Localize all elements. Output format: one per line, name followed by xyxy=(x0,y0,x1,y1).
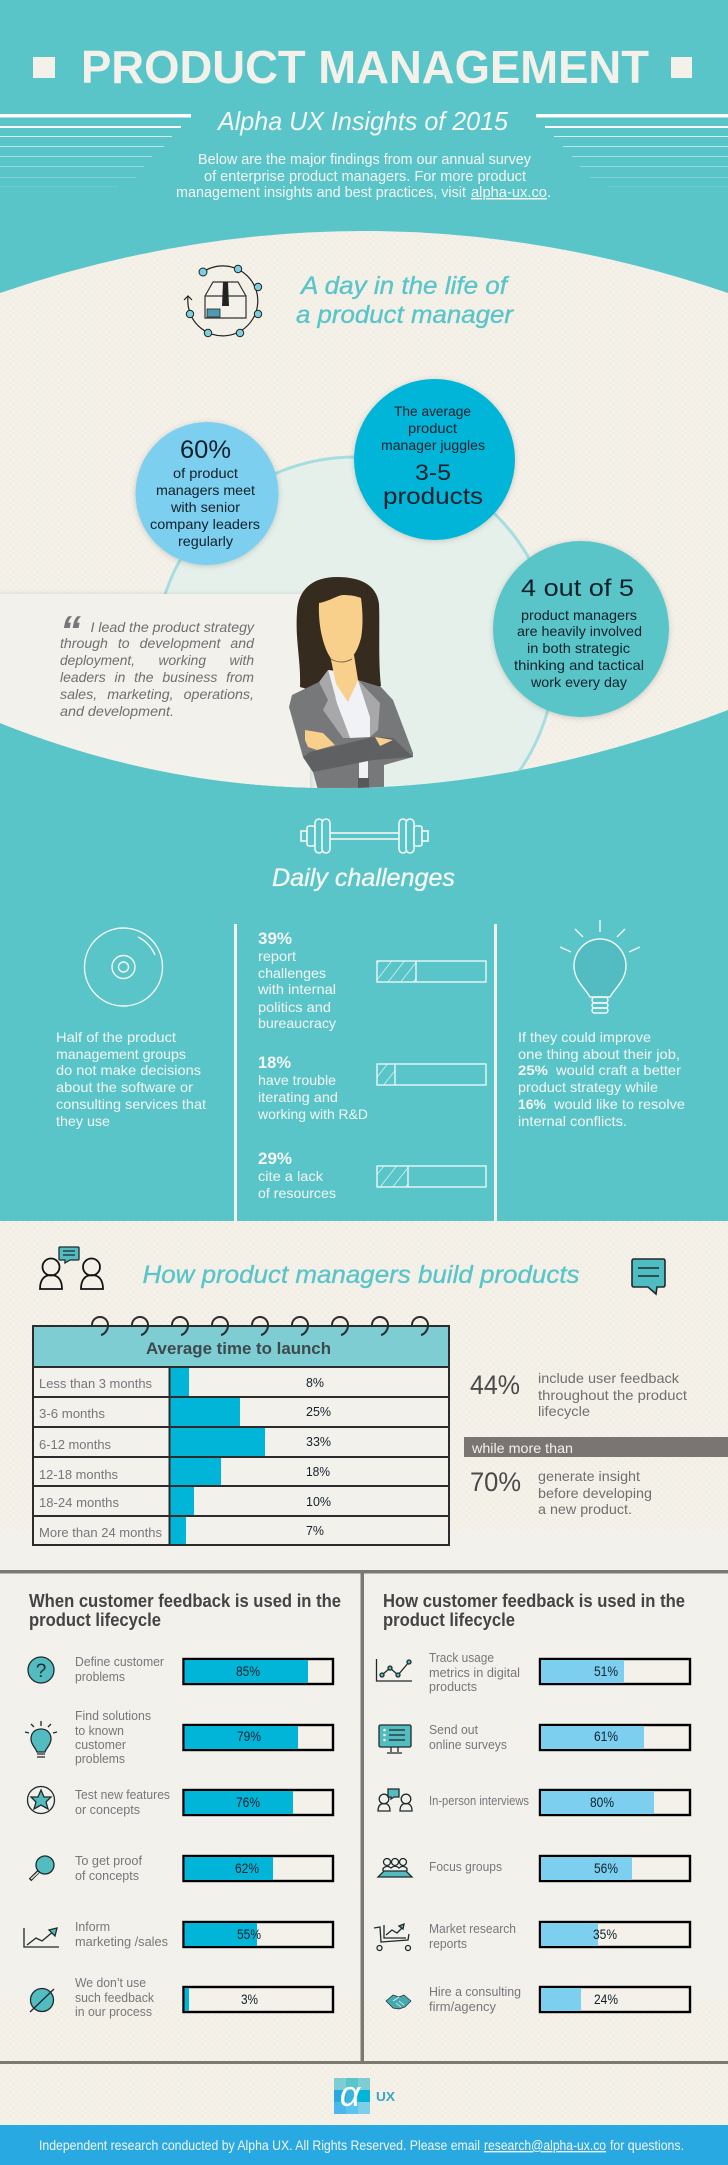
subtitle with side lines: Alpha UX Insights of 2015 xyxy=(216,106,509,136)
callout: 4 out of 5: 4 out of 5 xyxy=(521,575,634,602)
spiral rings xyxy=(92,1317,428,1335)
text: half of the groups: consulting services that xyxy=(56,1096,206,1112)
subtitle with side lines xyxy=(0,106,728,187)
row: track usage: 51% xyxy=(594,1663,618,1679)
row: test new features: or concepts xyxy=(75,1802,140,1817)
crossed arm xyxy=(303,737,413,772)
row: track usage: Track usage xyxy=(429,1650,494,1665)
row: define customer problems: 85% xyxy=(236,1663,260,1679)
row: inform marketing: 55% xyxy=(237,1926,261,1942)
hair xyxy=(297,577,381,700)
callout: 3-5 products: products xyxy=(383,483,483,509)
stat: 18%: have trouble xyxy=(258,1072,336,1088)
quote xyxy=(60,607,255,719)
logo: alpha UX: UX xyxy=(376,2089,395,2104)
row: inform marketing: marketing /sales xyxy=(75,1934,168,1949)
callout: 4 out of 5: are heavily involved xyxy=(517,623,642,639)
callout: 60% xyxy=(136,422,278,565)
stat: 18%: 18% xyxy=(258,1053,291,1072)
text: if they could improve: 25% xyxy=(518,1062,549,1078)
panel: how customer feedback is used xyxy=(374,1591,690,2014)
callout: 3-5 products: product xyxy=(408,420,457,436)
icon: chat bubble xyxy=(632,1259,665,1294)
row: to get proof: of concepts xyxy=(75,1868,139,1883)
face xyxy=(319,595,362,662)
row: define customer problems: Define customer xyxy=(75,1654,165,1669)
chart: average time to launch: Average time to launch xyxy=(146,1339,331,1358)
row: we don't use: in our process xyxy=(75,2004,152,2019)
quote: and development. xyxy=(60,703,174,719)
footer: research@alpha-ux.co xyxy=(484,2137,606,2153)
stat: 44% xyxy=(470,1370,687,1419)
stat: 39%: 39% xyxy=(258,929,292,948)
stat: 39%: bureaucracy xyxy=(258,1015,336,1031)
callout: 60%: with senior xyxy=(170,499,240,515)
text: if they could improve: If they could improve xyxy=(518,1029,651,1045)
row: online surveys xyxy=(379,1722,690,1753)
stat: 18%: working with R&D xyxy=(257,1106,368,1122)
stat: 39%: challenges xyxy=(258,965,326,981)
quote: sales, marketing, operations, xyxy=(60,686,254,702)
row: online surveys: Send out xyxy=(429,1722,478,1737)
heading: how product managers build products: How product managers build products xyxy=(142,1261,580,1289)
stat: 29%: cite a lack xyxy=(258,1168,324,1184)
stat: 70%: 70% xyxy=(470,1467,521,1497)
row: to get proof: To get proof xyxy=(75,1853,142,1868)
large ring xyxy=(164,456,549,788)
stat: 70% xyxy=(470,1467,652,1517)
row: consulting firm xyxy=(386,1984,690,2014)
intro text: . xyxy=(547,184,551,201)
row: in-person interviews: 80% xyxy=(590,1794,614,1810)
logo: alpha UX: α xyxy=(340,2073,362,2114)
row: to get proof xyxy=(30,1853,333,1883)
row: find solutions: 79% xyxy=(237,1728,261,1744)
footer xyxy=(0,2125,728,2165)
text: half of the groups: Half of the product xyxy=(56,1029,176,1045)
text: if they could improve: one thing about their job, xyxy=(518,1046,680,1062)
right hand xyxy=(375,737,393,746)
icon: product box cycle xyxy=(184,265,262,337)
heading: daily challenges: Daily challenges xyxy=(272,864,455,892)
row: online surveys: 61% xyxy=(594,1728,618,1744)
band: while more than: while more than xyxy=(471,1440,573,1456)
row values: 8% xyxy=(306,1375,324,1390)
stat: 29%: of resources xyxy=(258,1185,336,1201)
row: consulting firm: firm/agency xyxy=(429,1999,496,2014)
row: to get proof: 62% xyxy=(235,1860,259,1876)
stat: 18% xyxy=(257,1053,486,1122)
callout: 3-5 products xyxy=(354,379,515,540)
shirt xyxy=(328,670,370,738)
row labels xyxy=(39,1376,162,1540)
row: track usage: metrics in digital xyxy=(429,1665,520,1680)
quote: “ xyxy=(60,607,81,654)
callout: 4 out of 5: in both strategic xyxy=(527,640,630,656)
row: test new features: 76% xyxy=(236,1794,260,1810)
row: we don't use: We don’t use xyxy=(75,1975,146,1990)
row: focus groups: Focus groups xyxy=(429,1859,502,1874)
heading: when: When customer feedback is used in the xyxy=(29,1591,341,1611)
row labels: 6-12 months xyxy=(39,1437,111,1452)
stat: 18%: iterating and xyxy=(258,1089,338,1105)
text: if they could improve xyxy=(518,1029,685,1129)
row: we don't use: 3% xyxy=(241,1991,258,2007)
quote: leaders in the business from xyxy=(60,669,254,685)
blazer body xyxy=(289,680,413,790)
text: if they could improve: internal conflicts. xyxy=(518,1113,627,1129)
quote: through to development and xyxy=(60,635,255,651)
band: while more than xyxy=(464,1437,728,1457)
callout: 4 out of 5 xyxy=(493,541,669,717)
intro text: of enterprise product managers. For more product xyxy=(204,168,527,185)
stat: 39% xyxy=(257,929,486,1031)
callout: 3-5 products: manager juggles xyxy=(381,437,485,453)
heading: how: How customer feedback is used in the xyxy=(383,1591,685,1611)
row: market research: reports xyxy=(429,1936,467,1951)
callout: 60%: of product xyxy=(173,465,238,481)
header xyxy=(0,41,728,201)
stat: 39%: politics and xyxy=(258,999,331,1015)
intro text: Below are the major findings from our annual survey xyxy=(198,151,531,168)
row values xyxy=(306,1375,331,1538)
row values: 7% xyxy=(306,1523,324,1538)
stat: 44%: 44% xyxy=(470,1370,520,1400)
heading: a day in the life: A day in the life of xyxy=(299,272,510,300)
row labels: 18-24 months xyxy=(39,1495,119,1510)
text: if they could improve: would like to resolve xyxy=(553,1096,685,1112)
text: half of the groups xyxy=(56,1029,206,1129)
row labels: 12-18 months xyxy=(39,1467,118,1482)
row: track usage: products xyxy=(429,1679,477,1694)
row: market research: 35% xyxy=(593,1926,617,1942)
row labels: 3-6 months xyxy=(39,1406,105,1421)
quote: I lead the product strategy xyxy=(90,619,255,635)
icon: light bulb xyxy=(560,920,640,1013)
intro text: alpha-ux.co xyxy=(471,184,547,201)
row: test new features xyxy=(28,1786,333,1817)
row: in-person interviews: In-person interviews xyxy=(429,1793,529,1808)
stat: 70%: before developing xyxy=(538,1485,652,1501)
row: in-person interviews xyxy=(378,1789,690,1815)
row: focus groups xyxy=(378,1856,690,1881)
row: find solutions: Find solutions xyxy=(75,1708,151,1723)
row values: 25% xyxy=(306,1404,331,1419)
row: find solutions: to known xyxy=(75,1723,124,1738)
left hand xyxy=(305,730,335,750)
text: half of the groups: they use xyxy=(56,1113,110,1129)
row: define customer problems: problems xyxy=(75,1669,125,1684)
quote: deployment, working with xyxy=(60,652,254,668)
row: test new features: Test new features xyxy=(75,1787,170,1802)
stat: 39%: report xyxy=(258,948,296,964)
callout: 60%: 60% xyxy=(180,436,231,464)
panel: a day in the life xyxy=(0,231,728,788)
text: if they could improve: 16% xyxy=(518,1096,547,1112)
logo: alpha UX xyxy=(334,2073,395,2114)
row labels: Less than 3 months xyxy=(39,1376,152,1391)
lapels xyxy=(319,670,350,738)
callout: 60%: managers meet xyxy=(156,482,255,498)
heading: a day in the life xyxy=(296,272,515,329)
text: half of the groups: do not make decisions xyxy=(56,1062,201,1078)
row values: 33% xyxy=(306,1434,331,1449)
neck xyxy=(330,655,358,702)
row: find solutions xyxy=(25,1708,333,1766)
stat: 29%: 29% xyxy=(258,1149,292,1168)
row values: 10% xyxy=(306,1494,331,1509)
callout: 4 out of 5: thinking and tactical xyxy=(514,657,644,673)
callout: 4 out of 5: product managers xyxy=(521,607,637,623)
row labels: More than 24 months xyxy=(39,1525,162,1540)
heading: how: product lifecycle xyxy=(383,1610,515,1630)
row: we don't use: such feedback xyxy=(75,1990,154,2005)
chart: average time to launch xyxy=(33,1317,449,1545)
text: half of the groups: management groups xyxy=(56,1046,186,1062)
quote panel xyxy=(0,592,312,788)
row: we don't use xyxy=(30,1975,333,2019)
heading: when: product lifecycle xyxy=(29,1610,161,1630)
row: inform marketing: Inform xyxy=(75,1919,110,1934)
icon: dumbbell xyxy=(301,819,428,853)
panel: when customer feedback is used xyxy=(0,1570,728,2064)
woman illustration xyxy=(289,577,413,790)
heading: how xyxy=(383,1591,685,1630)
stat: 70%: generate insight xyxy=(538,1468,640,1484)
icon: disc xyxy=(84,928,162,1006)
callout: 3-5 products: The average xyxy=(394,403,471,419)
stat: 39%: with internal xyxy=(257,981,336,997)
heading: a day in the life: a product manager xyxy=(296,301,515,329)
panel: daily challenges xyxy=(56,819,685,1221)
panel: how product managers build products xyxy=(0,1221,728,2125)
row: inform marketing xyxy=(24,1919,333,1949)
row: focus groups: 56% xyxy=(594,1860,618,1876)
row: online surveys: online surveys xyxy=(429,1737,507,1752)
text: if they could improve: product strategy while xyxy=(518,1079,658,1095)
row values: 18% xyxy=(306,1464,330,1479)
text: half of the groups: about the software or xyxy=(56,1079,193,1095)
callout: 4 out of 5: work every day xyxy=(530,674,627,690)
row bars xyxy=(170,1367,265,1545)
stat: 29% xyxy=(258,1149,486,1201)
footer: Independent research conducted by Alpha UX. All Rights Reserved. Please email xyxy=(39,2137,480,2153)
row: consulting firm: 24% xyxy=(594,1991,618,2007)
row: consulting firm: Hire a consulting xyxy=(429,1984,521,1999)
row: track usage xyxy=(376,1650,690,1694)
callout: 60%: company leaders xyxy=(150,516,260,532)
intro text xyxy=(176,151,551,201)
row: find solutions: problems xyxy=(75,1751,125,1766)
stat: 70%: a new product. xyxy=(538,1501,632,1517)
callout: 3-5 products: 3-5 xyxy=(415,460,451,485)
title: PRODUCT MANAGEMENT xyxy=(81,41,649,93)
stat: 44%: include user feedback xyxy=(538,1370,680,1386)
row: market research: Market research xyxy=(429,1921,516,1936)
row: define customer problems: ? xyxy=(36,1661,46,1682)
callout: 60%: regularly xyxy=(178,533,233,549)
row: define customer problems xyxy=(28,1654,333,1684)
icon: two people talking xyxy=(40,1247,103,1289)
text: if they could improve: would craft a better xyxy=(555,1062,681,1078)
stat: 44%: throughout the product xyxy=(538,1387,687,1403)
row: market research xyxy=(374,1921,690,1951)
stat: 44%: lifecycle xyxy=(538,1403,590,1419)
intro text: management insights and best practices, visit xyxy=(176,184,467,201)
footer: for questions. xyxy=(610,2137,684,2153)
row: find solutions: customer xyxy=(75,1737,127,1752)
heading: when xyxy=(29,1591,341,1630)
